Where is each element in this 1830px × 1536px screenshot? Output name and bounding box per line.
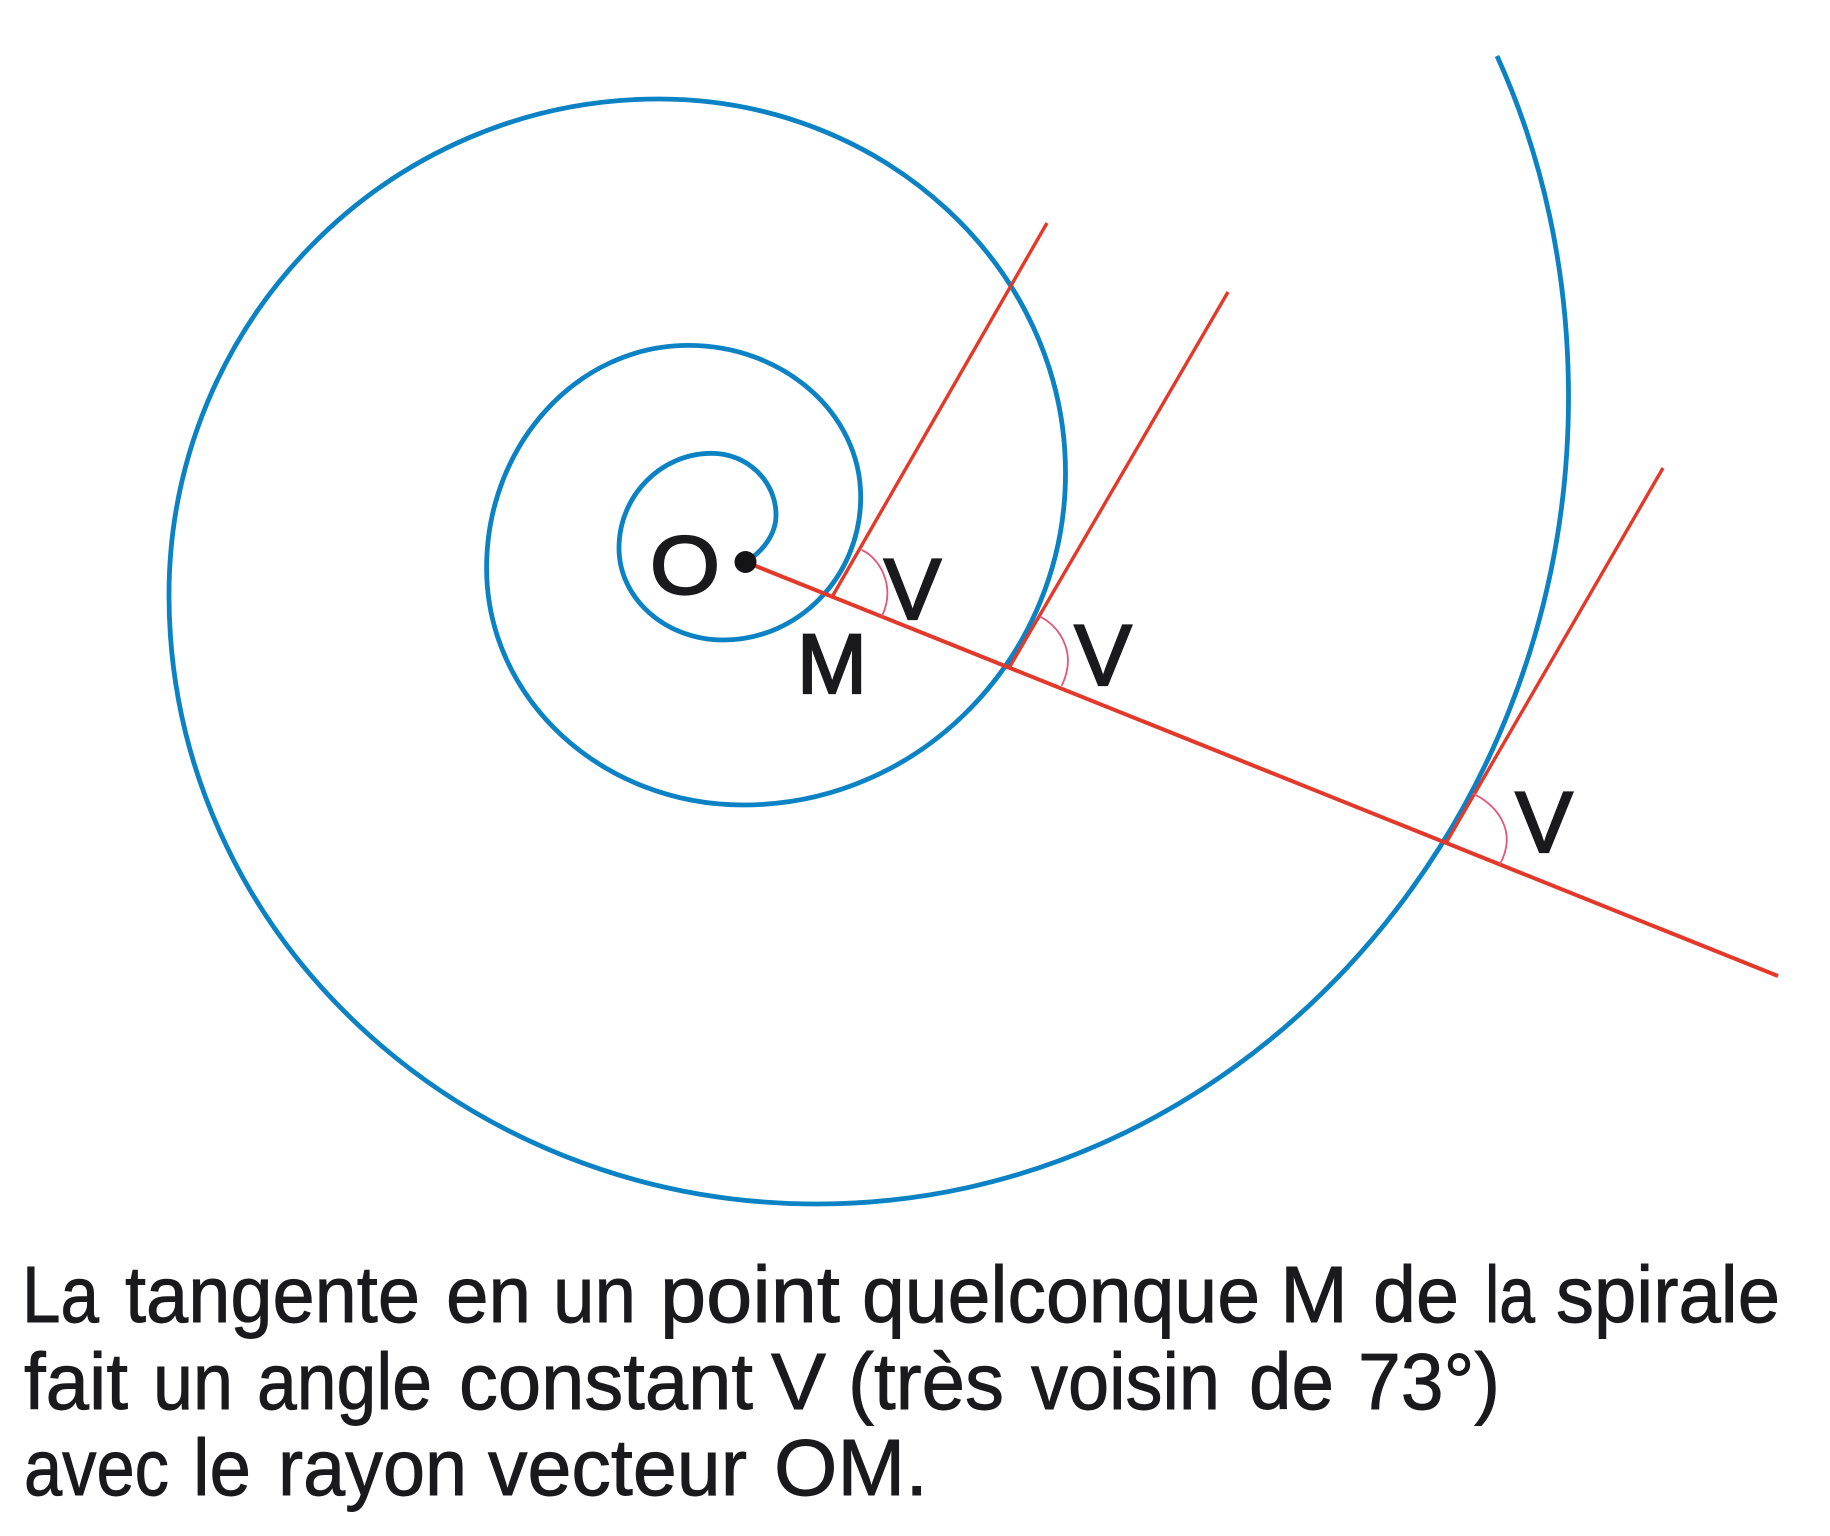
caption text: fait xyxy=(24,1337,128,1426)
caption text: tangente xyxy=(125,1250,420,1339)
caption text: V xyxy=(771,1337,827,1426)
center point O dot xyxy=(734,551,756,573)
caption text: 73°) xyxy=(1358,1337,1500,1426)
caption text: vecteur xyxy=(488,1423,747,1512)
label M: M xyxy=(797,617,867,711)
caption text xyxy=(22,1250,1780,1512)
caption text: point xyxy=(660,1250,840,1339)
caption text: un xyxy=(153,1337,233,1426)
label O: O xyxy=(650,518,720,612)
caption text: voisin xyxy=(1031,1337,1220,1426)
caption text: spirale xyxy=(1556,1250,1780,1339)
caption text: angle xyxy=(257,1337,432,1426)
caption text: le xyxy=(193,1423,251,1512)
red tangent at first point M xyxy=(832,223,1047,597)
caption text: OM. xyxy=(774,1423,928,1512)
caption text: constant xyxy=(459,1337,753,1426)
pink angle arc 2 xyxy=(1040,617,1068,686)
caption text: en xyxy=(446,1250,531,1339)
caption text: La xyxy=(22,1250,99,1339)
pink angle arc 3 xyxy=(1473,794,1507,865)
caption text: de xyxy=(1373,1250,1459,1339)
red radius vector OM xyxy=(746,562,1778,976)
label V third angle: V xyxy=(1515,775,1573,871)
red tangent at second point xyxy=(1009,292,1228,668)
blue spiral curve xyxy=(169,56,1568,1204)
caption text: un xyxy=(553,1250,636,1339)
pink angle arc 1 xyxy=(862,550,887,617)
label V second angle: V xyxy=(1074,608,1132,704)
caption text: avec xyxy=(24,1423,169,1512)
caption text: (très xyxy=(848,1337,1004,1426)
caption text: M xyxy=(1280,1250,1348,1339)
caption text: la xyxy=(1485,1250,1535,1339)
caption text: de xyxy=(1249,1337,1334,1426)
red tangent at third point xyxy=(1446,468,1663,843)
label V first angle: V xyxy=(884,542,941,638)
caption text: rayon xyxy=(278,1423,467,1512)
caption text: quelconque xyxy=(862,1250,1260,1339)
